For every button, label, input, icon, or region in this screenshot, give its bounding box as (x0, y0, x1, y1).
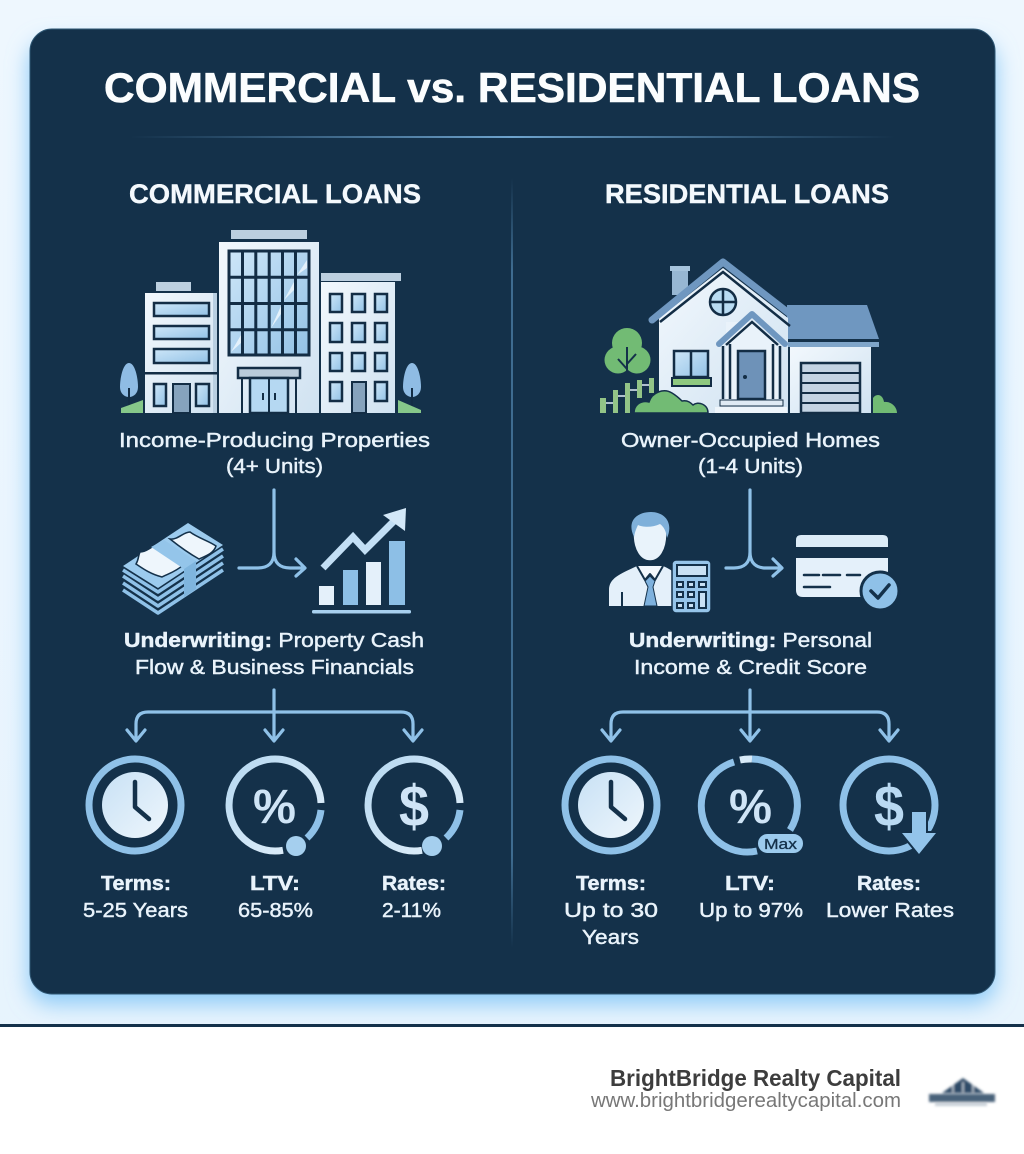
stat: terms: Years (582, 927, 639, 949)
stat: LTV (699, 873, 803, 922)
center tower (219, 230, 319, 413)
stat: LTV: Up to 97% (699, 900, 803, 922)
label: commercial underwriting: Flow & Business Financials (135, 657, 414, 679)
arrow: three-way branch (602, 690, 898, 741)
left building (145, 282, 217, 413)
icon: clock (565, 759, 657, 851)
label: residential underwriting: Income & Credit Score (634, 657, 867, 679)
icon: growth bar chart (312, 508, 411, 614)
label: residential underwriting: Underwriting: Personal (629, 630, 872, 652)
label: income-producing properties (119, 430, 430, 478)
icon: lower rate dollar with down arrow: $ (874, 774, 904, 839)
chimney (670, 266, 690, 295)
label: commercial underwriting (124, 630, 424, 679)
stat: rates: Rates: (857, 873, 921, 895)
title: COMMERCIAL vs. RESIDENTIAL LOANS (104, 64, 920, 111)
stat: terms: 5-25 Years (83, 900, 188, 922)
stat: rates (382, 873, 446, 922)
icon: clock (89, 759, 181, 851)
icon: credit card with check (796, 535, 899, 610)
stat: LTV (238, 873, 313, 922)
stat: terms: Up to 30 (564, 900, 658, 922)
icon: LTV percent gauge with max badge: Max (764, 836, 798, 853)
stat: rates (826, 873, 954, 922)
heading: residential loans: RESIDENTIAL LOANS (605, 179, 889, 209)
arrow: split connector (239, 490, 305, 576)
label: owner-occupied homes (621, 430, 880, 478)
tree and fence (600, 328, 654, 413)
icon: LTV percent gauge with max badge (701, 759, 804, 854)
right building (321, 273, 401, 413)
main house (652, 262, 799, 413)
porch (715, 314, 787, 413)
stat: rates: Lower Rates (826, 900, 954, 922)
icon: lower rate dollar with down arrow (843, 759, 936, 854)
stat: LTV: 65-85% (238, 900, 313, 922)
icon: stack of cash (123, 523, 223, 613)
column: commercial loans (83, 179, 460, 922)
company name: BrightBridge Realty Capital (610, 1065, 901, 1091)
stat: terms: Terms: (576, 873, 646, 895)
panel: comparison card (30, 29, 995, 994)
icon: office buildings (120, 230, 421, 413)
arrow: three-way branch (127, 690, 422, 741)
label: owner-occupied homes: Owner-Occupied Homes (621, 430, 880, 452)
label: owner-occupied homes: (1-4 Units) (698, 456, 803, 478)
company website: www.brightbridgerealtycapital.com (590, 1090, 901, 1112)
heading: commercial loans: COMMERCIAL LOANS (129, 179, 421, 209)
label: commercial underwriting: Underwriting: Property Cash (124, 630, 424, 652)
icon: LTV percent gauge: % (253, 781, 296, 834)
stat: rates: 2-11% (382, 900, 441, 922)
label: residential underwriting (629, 630, 872, 679)
stat: rates: Rates: (382, 873, 446, 895)
icon: rate dollar gauge: $ (399, 774, 429, 839)
stat: LTV: LTV: (725, 873, 775, 895)
icon: house (600, 262, 897, 413)
footer (0, 1024, 1024, 1154)
logo (929, 1078, 995, 1106)
icon: LTV percent gauge with max badge: % (729, 781, 772, 834)
icon: LTV percent gauge (229, 759, 321, 856)
stat: terms (564, 873, 658, 949)
stat: LTV: LTV: (250, 873, 300, 895)
arrow: split connector (726, 490, 782, 576)
icon: person with calculator (609, 512, 711, 613)
garage (787, 305, 879, 413)
bushes (634, 391, 897, 413)
label: income-producing properties: Income-Producing Properties (119, 430, 430, 452)
column: residential loans (564, 179, 954, 949)
label: income-producing properties: (4+ Units) (226, 456, 323, 478)
stat: terms: Terms: (101, 873, 171, 895)
icon: rate dollar gauge (368, 759, 460, 856)
stat: terms (83, 873, 188, 922)
